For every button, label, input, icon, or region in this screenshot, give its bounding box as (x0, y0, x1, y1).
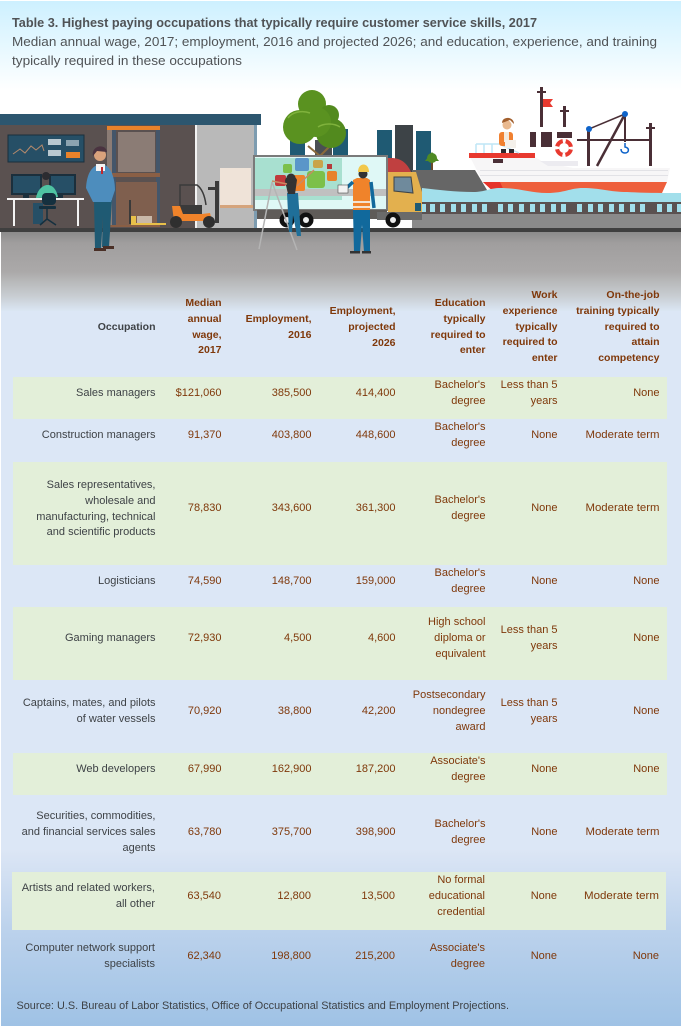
row: gaming managers: None (633, 632, 660, 644)
painter on ladder (259, 170, 314, 250)
table header: Occupation (98, 321, 156, 333)
table header: typically (515, 321, 558, 333)
row: sales representatives: Bachelor's (434, 494, 486, 506)
row: construction managers (42, 421, 660, 449)
row: gaming managers: Less than 5 (501, 624, 558, 636)
table header: competency (598, 352, 660, 364)
table header: On-the-job (606, 289, 660, 301)
row: computer network support: None (633, 950, 659, 962)
row: logisticians: 148,700 (272, 575, 312, 587)
row: logisticians: Logisticians (98, 575, 156, 587)
source note: Source: U.S. Bureau of Labor Statistics, Office of Occupational Statistics and Employment Projections. (16, 1000, 509, 1012)
road edge strip (0, 228, 681, 232)
table header: Work (531, 289, 558, 301)
row: gaming managers: years (531, 640, 558, 652)
storage racks (107, 126, 160, 227)
row: sales managers: 385,500 (272, 387, 312, 399)
row: captains, mates, and pilots: of water vessels (77, 713, 156, 725)
water and quay windows (421, 188, 681, 212)
row: artists: Moderate term (584, 890, 659, 902)
row: securities, commodities (22, 810, 660, 854)
row: computer network support: 215,200 (355, 950, 395, 962)
row: sales managers: years (531, 395, 558, 407)
row: web developers: degree (451, 771, 486, 783)
row: captains, mates, and pilots: Captains, mates, and pilots (23, 697, 156, 709)
row: web developers: 187,200 (356, 763, 396, 775)
table header: required to (431, 329, 486, 341)
row: captains, mates, and pilots: Less than 5 (501, 697, 558, 709)
illustration: port and warehouse scene (0, 87, 681, 254)
row: sales managers: Bachelor's (434, 379, 486, 391)
row: artists: None (531, 890, 557, 902)
row: construction managers: Moderate term (586, 429, 660, 441)
row: web developers: Associate's (430, 755, 486, 767)
row: sales representatives (36, 479, 660, 538)
row: captains, mates, and pilots: None (633, 705, 660, 717)
row: computer network support: Computer network support (25, 942, 155, 954)
background buildings (290, 125, 439, 172)
row: computer network support (25, 942, 659, 970)
table header: 2016 (288, 329, 312, 341)
row: logisticians: None (633, 575, 660, 587)
row: web developers: 162,900 (272, 763, 312, 775)
table header: Employment, (246, 313, 312, 325)
row: sales managers: Sales managers (76, 387, 156, 399)
row: sales representatives: 78,830 (188, 502, 222, 514)
table header: experience (503, 305, 558, 317)
table header: attain (631, 336, 660, 348)
row: artists: credential (437, 906, 485, 918)
man in blue suit (86, 146, 115, 251)
row: construction managers: 91,370 (188, 429, 222, 441)
table header: required to (503, 336, 558, 348)
row: logisticians (98, 567, 660, 595)
row: sales representatives: and scientific products (47, 526, 156, 538)
table header: wage, (191, 329, 222, 341)
row: sales representatives: None (531, 502, 558, 514)
row: sales managers: Less than 5 (501, 379, 558, 391)
row: securities, commodities: 375,700 (272, 826, 312, 838)
row: sales representatives: 361,300 (356, 502, 396, 514)
row: sales managers: None (633, 387, 660, 399)
row: logisticians: Bachelor's (434, 567, 486, 579)
row: securities, commodities: Moderate term (586, 826, 660, 838)
table header: required to (605, 321, 660, 333)
row: gaming managers (65, 616, 660, 660)
row: gaming managers: 72,930 (188, 632, 222, 644)
row: web developers: Web developers (76, 763, 156, 775)
row: captains, mates, and pilots: 42,200 (362, 705, 396, 717)
row: gaming managers: Gaming managers (65, 632, 156, 644)
table header: typically (443, 313, 486, 325)
row: artists: educational (429, 890, 485, 902)
row: captains, mates, and pilots: Postsecondary (413, 689, 486, 701)
row: gaming managers: High school (428, 616, 486, 628)
row: artists: all other (116, 898, 155, 910)
table row shading (12, 377, 667, 930)
row: construction managers: degree (451, 437, 486, 449)
row: sales managers: 414,400 (356, 387, 396, 399)
row: logisticians: None (531, 575, 558, 587)
row: sales representatives: wholesale and (84, 495, 156, 507)
engineer with hard hat (338, 164, 374, 254)
table header: projected (348, 321, 396, 333)
row: sales representatives: manufacturing, technical (36, 511, 156, 523)
wall chart screen (8, 135, 84, 162)
subtitle (12, 34, 657, 68)
row: gaming managers: 4,600 (368, 632, 396, 644)
table header: enter (532, 352, 558, 364)
table header: training typically (576, 305, 660, 317)
row: artists: 12,800 (277, 890, 311, 902)
row: securities, commodities: degree (451, 834, 486, 846)
sailor (499, 118, 516, 153)
row: computer network support: None (531, 950, 557, 962)
table header: enter (460, 344, 486, 356)
row: construction managers: 403,800 (272, 429, 312, 441)
row: artists: 63,540 (187, 890, 221, 902)
row: securities, commodities: 398,900 (356, 826, 396, 838)
row: sales representatives: Sales representatives, (47, 479, 156, 491)
row: gaming managers: diploma or (434, 632, 486, 644)
row: sales representatives: degree (451, 510, 486, 522)
table header: 2026 (372, 337, 396, 349)
row: gaming managers: 4,500 (284, 632, 312, 644)
row: construction managers: Construction managers (42, 429, 156, 441)
row: computer network support: 198,800 (271, 950, 311, 962)
row: artists: 13,500 (361, 890, 395, 902)
row: logisticians: 74,590 (188, 575, 222, 587)
sea wall (412, 170, 681, 228)
table header (98, 289, 660, 364)
row: gaming managers: equivalent (435, 648, 486, 660)
row: captains, mates, and pilots: nondegree (433, 705, 486, 717)
forklift (170, 181, 219, 228)
table header: Employment, (330, 305, 396, 317)
row: sales managers: $121,060 (176, 387, 222, 399)
row: captains, mates, and pilots: award (456, 721, 486, 733)
row: logisticians: 159,000 (356, 575, 396, 587)
row: construction managers: 448,600 (356, 429, 396, 441)
row: logisticians: degree (451, 583, 486, 595)
title: Table 3. Highest paying occupations that typically require customer service skills, 2017 (12, 15, 537, 30)
pallet boxes (220, 168, 253, 208)
table header: Education (435, 297, 486, 309)
tree (283, 90, 346, 156)
row: sales representatives: 343,600 (272, 502, 312, 514)
row: securities, commodities: agents (122, 842, 156, 854)
row: web developers: None (531, 763, 558, 775)
row: sales managers (76, 379, 660, 407)
row: securities, commodities: and financial services sales (22, 826, 156, 838)
row: captains, mates, and pilots: 70,920 (188, 705, 222, 717)
row: computer network support: degree (451, 958, 485, 970)
row: computer network support: 62,340 (187, 950, 221, 962)
row: construction managers: Bachelor's (434, 421, 486, 433)
row: web developers (76, 755, 660, 783)
row: securities, commodities: None (531, 826, 558, 838)
masts, flag and crane (530, 87, 655, 166)
row: captains, mates, and pilots: years (531, 713, 558, 725)
row: sales representatives: Moderate term (586, 502, 660, 514)
subtitle: typically required in these occupations (12, 53, 243, 68)
row: sales managers: degree (451, 395, 486, 407)
row: artists: Artists and related workers, (22, 882, 155, 894)
pallet jack (129, 200, 166, 225)
row: artists (22, 874, 659, 918)
row: construction managers: None (531, 429, 558, 441)
row: web developers: None (633, 763, 660, 775)
table header: 2017 (198, 344, 222, 356)
row: artists: No formal (437, 874, 485, 886)
row: captains, mates, and pilots: 38,800 (278, 705, 312, 717)
row: computer network support: Associate's (430, 942, 485, 954)
table header: annual (188, 313, 222, 325)
row: securities, commodities: 63,780 (188, 826, 222, 838)
row: securities, commodities: Bachelor's (434, 818, 486, 830)
row: captains, mates, and pilots (23, 689, 660, 733)
row: computer network support: specialists (104, 958, 155, 970)
truck (254, 156, 422, 228)
table header: Median (185, 297, 222, 309)
subtitle: Median annual wage, 2017; employment, 2016 and projected 2026; and education, experience, and training (12, 34, 657, 49)
row: web developers: 67,990 (188, 763, 222, 775)
row: securities, commodities: Securities, commodities, (36, 810, 156, 822)
ship (469, 87, 670, 193)
warehouse (0, 114, 261, 228)
desk and operator (7, 172, 84, 226)
